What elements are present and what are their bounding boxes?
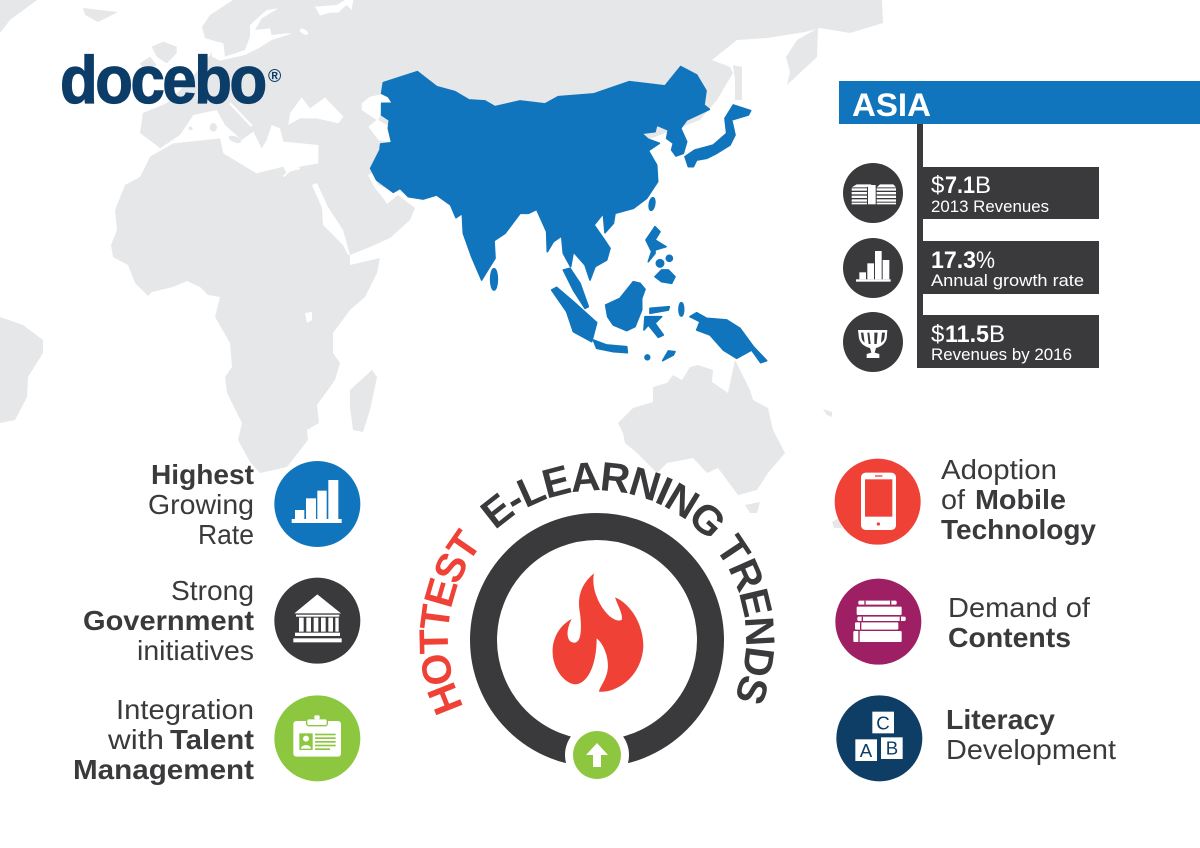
stat: revenues by 2016: Revenues by 2016 — [931, 345, 1072, 364]
icon: id badge — [274, 695, 360, 781]
icon: abc blocks: C — [876, 712, 890, 733]
trend text: strong government initiatives — [83, 575, 254, 666]
trend text: adoption of mobile technology: Technology — [941, 514, 1096, 545]
trend text: literacy development — [946, 704, 1116, 765]
ring — [484, 526, 710, 754]
Asia header bar: ASIA — [852, 87, 931, 123]
icon: abc blocks: B — [886, 738, 898, 759]
stat: annual growth rate: Annual growth rate — [931, 271, 1084, 290]
trend text: strong government initiatives: Strong — [171, 575, 254, 606]
trend text: literacy development: Literacy — [946, 704, 1055, 735]
trend text: integration with talent management: Integration — [116, 694, 254, 725]
curved title: hottest e-learning trends: E-LEARNING TRENDS — [480, 462, 775, 704]
trend text: highest growing rate: Growing — [148, 489, 254, 520]
trend text: strong government initiatives: Government — [83, 605, 254, 636]
trend text: demand of contents: Demand of — [948, 592, 1090, 623]
stat: 2013 revenues: $ — [931, 172, 944, 199]
icon: abc blocks: A — [860, 740, 873, 761]
icon: stack of books — [835, 579, 921, 665]
trend text: integration with talent management — [73, 694, 254, 785]
docebo logo: ® — [268, 66, 281, 86]
icon: government building — [274, 578, 360, 664]
Asia highlighted map — [371, 67, 767, 363]
trend text: highest growing rate: Highest — [151, 459, 254, 490]
icon: smartphone — [835, 459, 921, 545]
stat: annual growth rate — [923, 241, 1099, 294]
trend text: highest growing rate: Rate — [198, 519, 254, 550]
icon: abc blocks — [836, 695, 922, 781]
trend text: adoption of mobile technology: Adoption — [941, 454, 1057, 485]
trend text: demand of contents: Contents — [948, 622, 1071, 653]
icon: money stacks — [843, 163, 903, 223]
central ring with flame and trends title — [419, 462, 775, 779]
icon: trophy — [843, 312, 903, 372]
trend text: highest growing rate — [148, 459, 254, 550]
stat: revenues by 2016: $ — [931, 321, 944, 348]
stat: revenues by 2016: B — [989, 321, 1005, 348]
panel: Asia stats — [839, 81, 1200, 372]
stat: revenues by 2016 — [923, 315, 1099, 368]
stat: 2013 revenues: 7.1 — [945, 172, 975, 199]
docebo logo: docebo — [60, 43, 265, 118]
stat: annual growth rate: % — [976, 247, 995, 274]
curved title: hottest e-learning trends: HOTTEST — [419, 528, 477, 716]
trend text: demand of contents — [948, 592, 1090, 653]
stat: 2013 revenues — [923, 167, 1099, 219]
stat: 2013 revenues: 2013 Revenues — [931, 197, 1049, 216]
Asia header bar — [839, 81, 1200, 124]
stat: revenues by 2016: 11.5 — [945, 321, 989, 348]
icon: flame — [553, 573, 643, 692]
trend text: integration with talent management: with — [107, 724, 164, 755]
trend text: adoption of mobile technology: of — [941, 484, 965, 515]
icon: growth bars — [274, 461, 360, 547]
trend text: adoption of mobile technology: Mobile — [975, 484, 1066, 515]
trend text: integration with talent management: Management — [73, 754, 254, 785]
icon: up arrow badge — [565, 723, 629, 787]
trend text: literacy development: Development — [946, 734, 1116, 765]
trend text: adoption of mobile technology — [941, 454, 1096, 545]
stat: annual growth rate: 17.3 — [931, 247, 976, 274]
background world map — [0, 0, 883, 528]
trend text: strong government initiatives: initiatives — [137, 635, 254, 666]
icon: bar chart — [843, 238, 903, 298]
trend text: integration with talent management: Talent — [170, 724, 254, 755]
stat: 2013 revenues: B — [975, 172, 991, 199]
